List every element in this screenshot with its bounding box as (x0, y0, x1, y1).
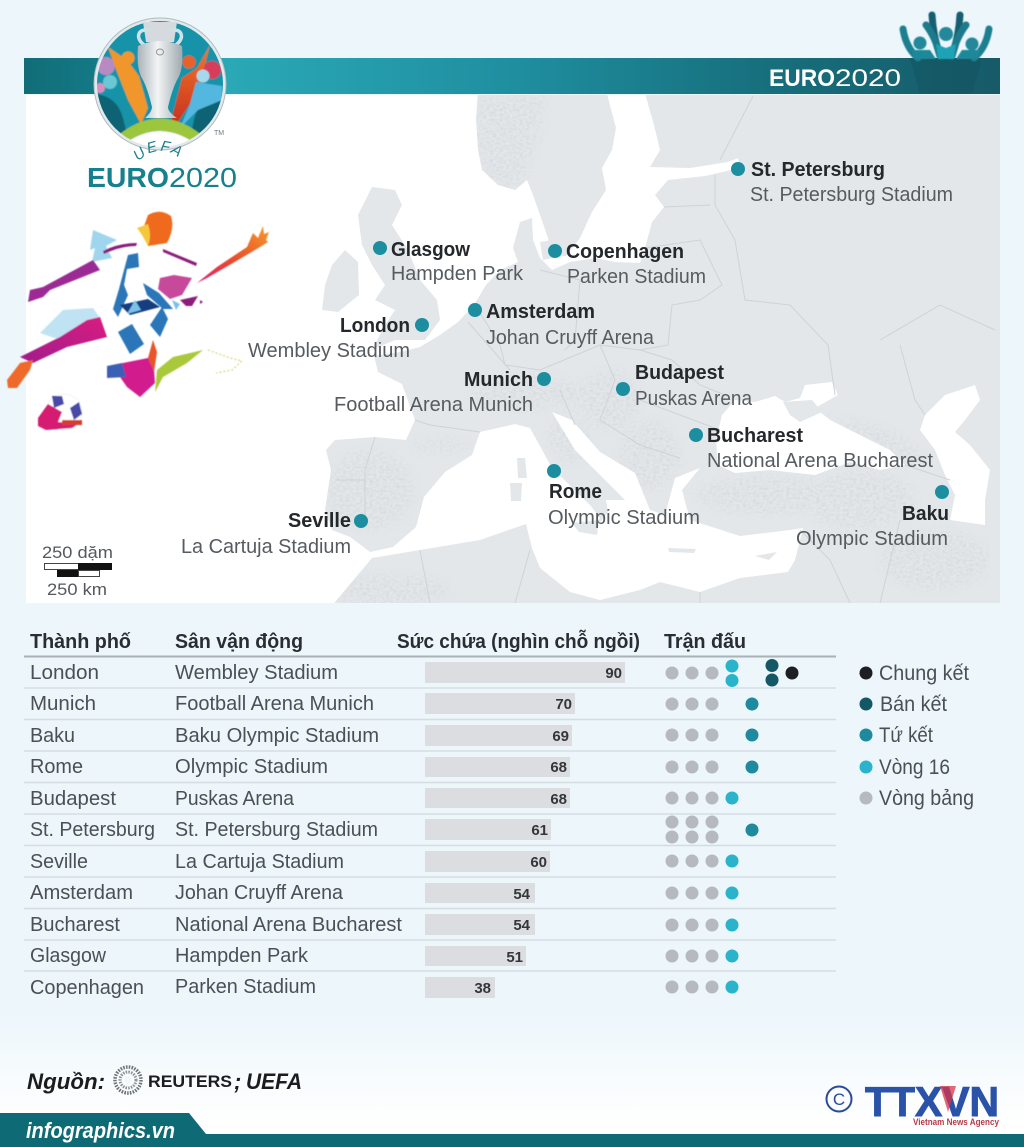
row: Bucharest: National Arena Bucharest (175, 914, 402, 936)
row: St. Petersburg (30, 816, 758, 844)
label: Glasgow (373, 239, 524, 285)
row: Bucharest: Bucharest (30, 914, 120, 936)
logo UEFA arc: UEFA (134, 140, 182, 160)
label: Rome: Olympic Stadium (548, 507, 700, 529)
row: Amsterdam: 54 (513, 886, 531, 903)
label: Budapest: Puskas Arena (635, 388, 753, 410)
player head (142, 212, 172, 246)
player splashes (40, 308, 100, 340)
label: Rome (547, 464, 700, 529)
header band (24, 58, 1000, 94)
scale bar: 250 km (47, 580, 107, 599)
label: Rome: Rome (549, 481, 602, 503)
row: Budapest: Puskas Arena (175, 788, 295, 810)
label: Baku (796, 485, 949, 550)
row: Seville: La Cartuja Stadium (175, 851, 344, 873)
label: Budapest (616, 362, 753, 410)
sea: Black Sea (716, 382, 905, 475)
label: Copenhagen (548, 241, 706, 288)
legend (860, 662, 974, 810)
copyright and TTXVN logo: TTXVN (865, 1078, 999, 1125)
row: Amsterdam: Amsterdam (30, 882, 133, 904)
label: Amsterdam: Amsterdam (486, 301, 595, 323)
label: Amsterdam: Johan Cruyff Arena (486, 327, 655, 349)
row: Amsterdam (30, 882, 738, 904)
row: Baku: 69 (552, 728, 569, 745)
source line: REUTERS (148, 1072, 232, 1091)
footer bar and website tab: infographics.vn (26, 1118, 175, 1143)
label: Bucharest (689, 425, 933, 472)
row: Munich: 70 (555, 696, 572, 713)
row: Rome (30, 756, 758, 778)
legend: round of 16: Vòng 16 (879, 756, 950, 779)
row: Bucharest (30, 914, 738, 936)
sea: Caspian (920, 385, 990, 525)
source line: ; (234, 1069, 241, 1094)
row: Baku (30, 725, 758, 747)
row: St. Petersburg: 61 (531, 822, 548, 839)
legend: final: Chung kết (879, 662, 969, 685)
row: St. Petersburg: St. Petersburg (30, 819, 155, 841)
source line: Nguồn: (27, 1069, 105, 1094)
row: Copenhagen: 38 (474, 980, 491, 997)
table header: Thành phố (30, 631, 131, 653)
scale bar: 250 dặm (42, 543, 113, 562)
label: London: London (340, 315, 410, 337)
icon: football (38, 394, 82, 430)
label: Copenhagen: Copenhagen (566, 241, 684, 263)
source line: UEFA (246, 1069, 302, 1094)
row: London (30, 659, 798, 687)
label: Munich: Munich (464, 369, 533, 391)
table header: Sân vận động (175, 631, 303, 653)
label: London: Wembley Stadium (248, 340, 410, 362)
row: Rome: Rome (30, 756, 83, 778)
country borders (335, 96, 995, 603)
row: Bucharest: 54 (513, 917, 531, 934)
row: Rome: 68 (550, 759, 567, 776)
row: London: Wembley Stadium (175, 662, 338, 684)
label: St. Petersburg (731, 159, 953, 206)
player left leg (20, 317, 107, 363)
header wordmark: EURO2020: EURO (769, 65, 835, 92)
logo wordmark (87, 162, 237, 193)
label: Glasgow: Hampden Park (391, 263, 524, 285)
label: Munich: Football Arena Munich (334, 394, 533, 416)
row: Glasgow (30, 945, 738, 967)
legend: quarter-final (860, 724, 933, 747)
row: Rome: Olympic Stadium (175, 756, 328, 778)
copyright and TTXVN logo: Vietnam News Agency (913, 1117, 999, 1127)
player left arm (28, 260, 100, 302)
row: Amsterdam: Johan Cruyff Arena (175, 882, 344, 904)
footer bar and website tab (0, 1113, 1024, 1147)
icon: Reuters logo (115, 1067, 141, 1093)
label: Bucharest: Bucharest (707, 425, 803, 447)
source line (27, 1067, 302, 1094)
label: Seville (181, 510, 368, 558)
label: Budapest: Budapest (635, 362, 724, 384)
player knee (107, 357, 155, 397)
label: Glasgow: Glasgow (391, 239, 470, 261)
map markers and labels (181, 159, 953, 558)
header wordmark: EURO2020 (769, 65, 901, 92)
row: Budapest: 68 (550, 791, 567, 808)
scale bar (42, 543, 113, 599)
label: Copenhagen: Parken Stadium (567, 266, 706, 288)
row: Budapest (30, 788, 738, 810)
logo wordmark: EURO (87, 162, 169, 193)
label: Seville: Seville (288, 510, 351, 532)
panel: map of Europe (20, 90, 1000, 608)
row: London: 90 (605, 665, 622, 682)
row: Seville (30, 851, 738, 873)
legend: quarter-final: Tứ kết (879, 724, 933, 747)
label: Seville: La Cartuja Stadium (181, 536, 351, 558)
logo TM mark: TM (214, 130, 224, 137)
legend: group stage: Vòng bảng (879, 787, 974, 810)
label: Baku: Baku (902, 503, 949, 525)
row: Munich (30, 693, 758, 715)
UEFA EURO 2020 logo (87, 18, 237, 193)
label: Amsterdam (468, 301, 655, 349)
logo roundel (94, 18, 226, 150)
islands (322, 187, 822, 560)
icon: crowd of fans (903, 15, 989, 59)
legend: semi-final: Bán kết (880, 693, 947, 716)
row: St. Petersburg: St. Petersburg Stadium (175, 819, 378, 841)
row: Glasgow: 51 (506, 949, 523, 966)
player trailing foot (155, 350, 203, 392)
row: Seville: Seville (30, 851, 88, 873)
row: London: London (30, 662, 99, 684)
player boot (7, 360, 33, 388)
logo trophy (138, 22, 182, 118)
logo wordmark: 2020 (169, 162, 237, 193)
row: Budapest: Budapest (30, 788, 116, 810)
row: Copenhagen (30, 976, 738, 999)
header wordmark: EURO2020: 2020 (835, 65, 901, 92)
illustration: football player (7, 212, 269, 430)
label: Munich (334, 369, 551, 416)
sea: Atlantic, North Sea, Baltic and Mediterranean (20, 90, 803, 608)
label: St. Petersburg: St. Petersburg Stadium (750, 184, 953, 206)
label: London (248, 315, 429, 362)
row: Copenhagen: Parken Stadium (175, 976, 316, 998)
row: Glasgow: Glasgow (30, 945, 107, 967)
player jersey marks (103, 243, 197, 266)
row: Munich: Munich (30, 693, 96, 715)
row: Munich: Football Arena Munich (175, 693, 374, 715)
row: Seville: 60 (530, 854, 547, 871)
copyright and TTXVN logo: C (833, 1090, 845, 1109)
row: Baku: Baku (30, 725, 75, 747)
panel: stadium table (24, 629, 836, 999)
row: Glasgow: Hampden Park (175, 945, 309, 967)
table header: Trận đấu (664, 631, 746, 653)
label: Baku: Olympic Stadium (796, 528, 948, 550)
table header: Sức chứa (nghìn chỗ ngồi) (397, 629, 640, 653)
label: Bucharest: National Arena Bucharest (707, 450, 933, 472)
row: Baku: Baku Olympic Stadium (175, 725, 379, 747)
table header (24, 629, 836, 658)
label: St. Petersburg: St. Petersburg (751, 159, 885, 181)
player right arm (195, 226, 269, 284)
row: Copenhagen: Copenhagen (30, 977, 144, 999)
